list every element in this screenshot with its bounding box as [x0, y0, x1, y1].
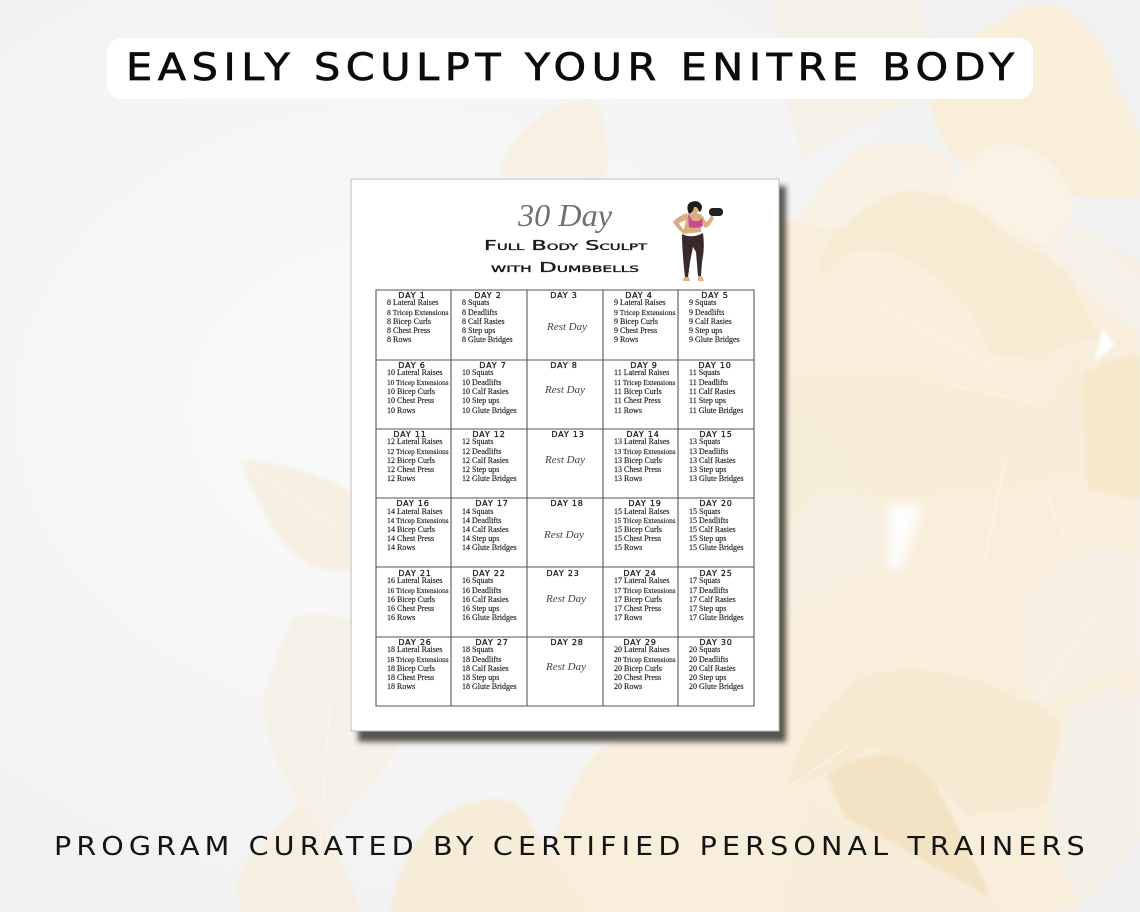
day 18: [543, 499, 584, 541]
day 11: 12 Tricep Extensions: [387, 447, 449, 456]
day 13: DAY 13: [551, 430, 585, 439]
day 14: 13 Chest Press: [614, 465, 661, 474]
day 4: 9 Bicep Curls: [614, 317, 658, 326]
day 29: DAY 29: [623, 638, 657, 647]
day 21: [387, 569, 449, 622]
day 24: 17 Chest Press: [614, 604, 661, 613]
day 12: 12 Squats: [462, 437, 493, 446]
day 26: 18 Chest Press: [387, 673, 434, 682]
day 1: DAY 1: [398, 291, 426, 300]
day 5: [689, 291, 740, 344]
day 11: 12 Rows: [387, 474, 415, 483]
day 8: [544, 361, 585, 396]
day 20: 15 Deadlifts: [689, 516, 728, 525]
day 2: 8 Deadlifts: [462, 308, 497, 317]
title banner: [107, 38, 1033, 99]
day 29: 20 Lateral Raises: [614, 645, 670, 654]
day 4: 9 Tricep Extensions: [614, 308, 676, 317]
day 16: [387, 499, 449, 552]
day 29: 20 Chest Press: [614, 673, 661, 682]
left feathers: [240, 460, 350, 571]
pale gap: [888, 503, 922, 570]
day 9: [614, 361, 676, 415]
day 6: DAY 6: [398, 361, 426, 370]
day 6: 10 Lateral Raises: [387, 368, 443, 377]
day 25: 17 Glute Bridges: [689, 613, 744, 622]
day 2: 8 Calf Rasies: [462, 317, 505, 326]
day 20: DAY 20: [699, 499, 733, 508]
day 12: [462, 430, 517, 483]
day 16: 14 Bicep Curls: [387, 525, 435, 534]
day 7: 10 Calf Rasies: [462, 387, 509, 396]
day 16: 14 Tricep Extensions: [387, 516, 449, 525]
day 27: 18 Squats: [462, 645, 493, 654]
base feather mass: [545, 190, 1140, 912]
day 22: DAY 22: [472, 569, 506, 578]
day 15: DAY 15: [699, 430, 733, 439]
day 22: 16 Step ups: [462, 604, 499, 613]
day 27: 18 Calf Rasies: [462, 664, 509, 673]
calendar grid: [376, 290, 754, 706]
day 17: DAY 17: [475, 499, 509, 508]
day 20: 15 Glute Bridges: [689, 543, 744, 552]
day 26: 18 Lateral Raises: [387, 645, 443, 654]
day 25: 17 Squats: [689, 576, 720, 585]
day 9: 11 Chest Press: [614, 396, 661, 405]
day 26: [387, 638, 449, 691]
day 7: 10 Step ups: [462, 396, 499, 405]
day 4: 9 Lateral Raises: [614, 298, 666, 307]
day 21: 16 Chest Press: [387, 604, 434, 613]
day 6: 10 Rows: [387, 406, 415, 415]
day 5: 9 Calf Rasies: [689, 317, 732, 326]
day 15: 13 Glute Bridges: [689, 474, 744, 483]
day 30: 20 Deadlifts: [689, 655, 728, 664]
day 12: DAY 12: [472, 430, 506, 439]
sheet heading: [484, 197, 648, 276]
day 26: 18 Rows: [387, 682, 415, 691]
day 24: [614, 569, 676, 622]
day 8: Rest Day: [544, 384, 585, 396]
day 9: 11 Rows: [614, 406, 642, 415]
day 20: 15 Squats: [689, 507, 720, 516]
feather shafts: [240, 105, 1095, 850]
day 30: 20 Squats: [689, 645, 720, 654]
day 12: 12 Calf Rasies: [462, 456, 509, 465]
day 8: DAY 8: [550, 361, 578, 370]
day 21: 16 Rows: [387, 613, 415, 622]
day 7: 10 Deadlifts: [462, 378, 501, 387]
day 14: 13 Rows: [614, 474, 642, 483]
day 15: 13 Calf Rasies: [689, 456, 736, 465]
day 30: 20 Calf Rasies: [689, 664, 736, 673]
day 21: 16 Tricep Extensions: [387, 586, 449, 595]
day 17: 14 Calf Rasies: [462, 525, 509, 534]
day 20: 15 Step ups: [689, 534, 726, 543]
day 21: 16 Lateral Raises: [387, 576, 443, 585]
day 23: [545, 569, 586, 605]
day 1: 8 Bicep Curls: [387, 317, 431, 326]
day 29: 20 Tricep Extensions: [614, 655, 676, 664]
day 19: [614, 499, 676, 552]
icon: woman lifting dumbbell: [673, 201, 723, 281]
day 2: DAY 2: [474, 291, 502, 300]
footer caption: PROGRAM CURATED BY CERTIFIED PERSONAL TRAINERS: [54, 832, 1085, 862]
day 18: Rest Day: [543, 529, 584, 541]
day 22: 16 Deadlifts: [462, 586, 501, 595]
day 4: DAY 4: [625, 291, 653, 300]
title: EASILY SCULPT YOUR ENITRE BODY: [126, 47, 1015, 89]
day 17: 14 Squats: [462, 507, 493, 516]
day 13: Rest Day: [544, 454, 585, 466]
day 6: 10 Chest Press: [387, 396, 434, 405]
day 2: 8 Step ups: [462, 326, 495, 335]
calendar entries: [387, 291, 744, 691]
day 6: 10 Bicep Curls: [387, 387, 435, 396]
day 20: 15 Calf Rasies: [689, 525, 736, 534]
day 3: DAY 3: [550, 291, 578, 300]
day 6: [387, 361, 449, 415]
day 22: [462, 569, 517, 622]
day 6: 10 Tricep Extensions: [387, 378, 449, 387]
day 27: 18 Deadlifts: [462, 655, 501, 664]
day 22: 16 Squats: [462, 576, 493, 585]
day 29: 20 Bicep Curls: [614, 664, 662, 673]
day 26: 18 Bicep Curls: [387, 664, 435, 673]
day 1: 8 Lateral Raises: [387, 298, 439, 307]
day 19: 15 Chest Press: [614, 534, 661, 543]
day 11: 12 Lateral Raises: [387, 437, 443, 446]
day 11: [387, 430, 449, 483]
day 14: DAY 14: [626, 430, 660, 439]
day 24: 17 Rows: [614, 613, 642, 622]
day 15: 13 Step ups: [689, 465, 726, 474]
day 19: 15 Bicep Curls: [614, 525, 662, 534]
day 15: [689, 430, 744, 483]
day 17: 14 Deadlifts: [462, 516, 501, 525]
day 10: 11 Glute Bridges: [689, 406, 743, 415]
day 3: Rest Day: [546, 321, 587, 333]
day 9: 11 Lateral Raises: [614, 368, 669, 377]
day 27: DAY 27: [475, 638, 509, 647]
day 24: DAY 24: [623, 569, 657, 578]
day 15: 13 Squats: [689, 437, 720, 446]
day 19: 15 Tricep Extensions: [614, 516, 676, 525]
day 17: 14 Glute Bridges: [462, 543, 517, 552]
day 23: Rest Day: [545, 593, 586, 605]
day 10: 11 Step ups: [689, 396, 726, 405]
day 22: 16 Calf Rasies: [462, 595, 509, 604]
day 4: 9 Chest Press: [614, 326, 657, 335]
day 10: [689, 361, 743, 415]
day 9: 11 Bicep Curls: [614, 387, 662, 396]
day 25: 17 Calf Rasies: [689, 595, 736, 604]
day 5: DAY 5: [701, 291, 729, 300]
day 22: 16 Glute Bridges: [462, 613, 517, 622]
day 19: 15 Rows: [614, 543, 642, 552]
day 1: 8 Rows: [387, 335, 411, 344]
day 17: 14 Step ups: [462, 534, 499, 543]
day 2: 8 Squats: [462, 298, 489, 307]
day 18: DAY 18: [550, 499, 584, 508]
day 12: 12 Glute Bridges: [462, 474, 517, 483]
day 13: [544, 430, 585, 466]
day 1: [387, 291, 449, 344]
day 19: DAY 19: [628, 499, 662, 508]
day 7: DAY 7: [479, 361, 507, 370]
day 4: [614, 291, 676, 344]
day 10: 11 Deadlifts: [689, 378, 728, 387]
day 7: [462, 361, 517, 415]
day 1: 8 Tricep Extensions: [387, 308, 449, 317]
day 16: 14 Lateral Raises: [387, 507, 443, 516]
feather background: [235, 0, 1140, 912]
day 16: 14 Rows: [387, 543, 415, 552]
day 30: 20 Step ups: [689, 673, 726, 682]
day 10: 11 Calf Rasies: [689, 387, 735, 396]
day 26: 18 Tricep Extensions: [387, 655, 449, 664]
day 21: 16 Bicep Curls: [387, 595, 435, 604]
subtitle line 1: Full Body Sculpt: [484, 238, 648, 254]
day 27: 18 Glute Bridges: [462, 682, 517, 691]
day 25: [689, 569, 744, 622]
day 7: 10 Glute Bridges: [462, 406, 517, 415]
day 29: 20 Rows: [614, 682, 642, 691]
day 25: DAY 25: [699, 569, 733, 578]
day 2: [462, 291, 513, 344]
day 1: 8 Chest Press: [387, 326, 430, 335]
day 28: Rest Day: [545, 661, 586, 673]
day 14: 13 Tricep Extensions: [614, 447, 676, 456]
day 21: DAY 21: [398, 569, 432, 578]
day 28: [545, 638, 586, 673]
day 17: [462, 499, 517, 552]
workout calendar sheet: [351, 179, 779, 731]
day 10: DAY 10: [698, 361, 732, 370]
day 2: 8 Glute Bridges: [462, 335, 513, 344]
day 27: 18 Step ups: [462, 673, 499, 682]
day 3: [546, 291, 587, 333]
day 16: 14 Chest Press: [387, 534, 434, 543]
day 30: [689, 638, 744, 691]
day 11: 12 Bicep Curls: [387, 456, 435, 465]
day 10: 11 Squats: [689, 368, 720, 377]
day 5: 9 Step ups: [689, 326, 722, 335]
day 27: [462, 638, 517, 691]
subtitle line 2: with Dumbbells: [491, 260, 639, 276]
day 26: DAY 26: [398, 638, 432, 647]
day 25: 17 Deadlifts: [689, 586, 728, 595]
day 4: 9 Rows: [614, 335, 638, 344]
day 12: 12 Deadlifts: [462, 447, 501, 456]
day 24: 17 Bicep Curls: [614, 595, 662, 604]
day 14: [614, 430, 676, 483]
day 30: 20 Glute Bridges: [689, 682, 744, 691]
day 9: 11 Tricep Extensions: [614, 378, 676, 387]
day 14: 13 Lateral Raises: [614, 437, 670, 446]
day 5: 9 Deadlifts: [689, 308, 724, 317]
day 9: DAY 9: [630, 361, 658, 370]
day 5: 9 Glute Bridges: [689, 335, 740, 344]
day 12: 12 Step ups: [462, 465, 499, 474]
day 11: 12 Chest Press: [387, 465, 434, 474]
script heading: 30 Day: [517, 197, 613, 233]
day 24: 17 Lateral Raises: [614, 576, 670, 585]
day 5: 9 Squats: [689, 298, 716, 307]
day 14: 13 Bicep Curls: [614, 456, 662, 465]
sheet shadow: [358, 186, 786, 742]
day 7: 10 Squats: [462, 368, 493, 377]
day 29: [614, 638, 676, 691]
day 19: 15 Lateral Raises: [614, 507, 670, 516]
day 25: 17 Step ups: [689, 604, 726, 613]
day 16: DAY 16: [396, 499, 430, 508]
day 15: 13 Deadlifts: [689, 447, 728, 456]
day 24: 17 Tricep Extensions: [614, 586, 676, 595]
day 11: DAY 11: [393, 430, 427, 439]
day 28: DAY 28: [550, 638, 584, 647]
day 30: DAY 30: [699, 638, 733, 647]
day 23: DAY 23: [546, 569, 580, 578]
day 20: [689, 499, 744, 552]
